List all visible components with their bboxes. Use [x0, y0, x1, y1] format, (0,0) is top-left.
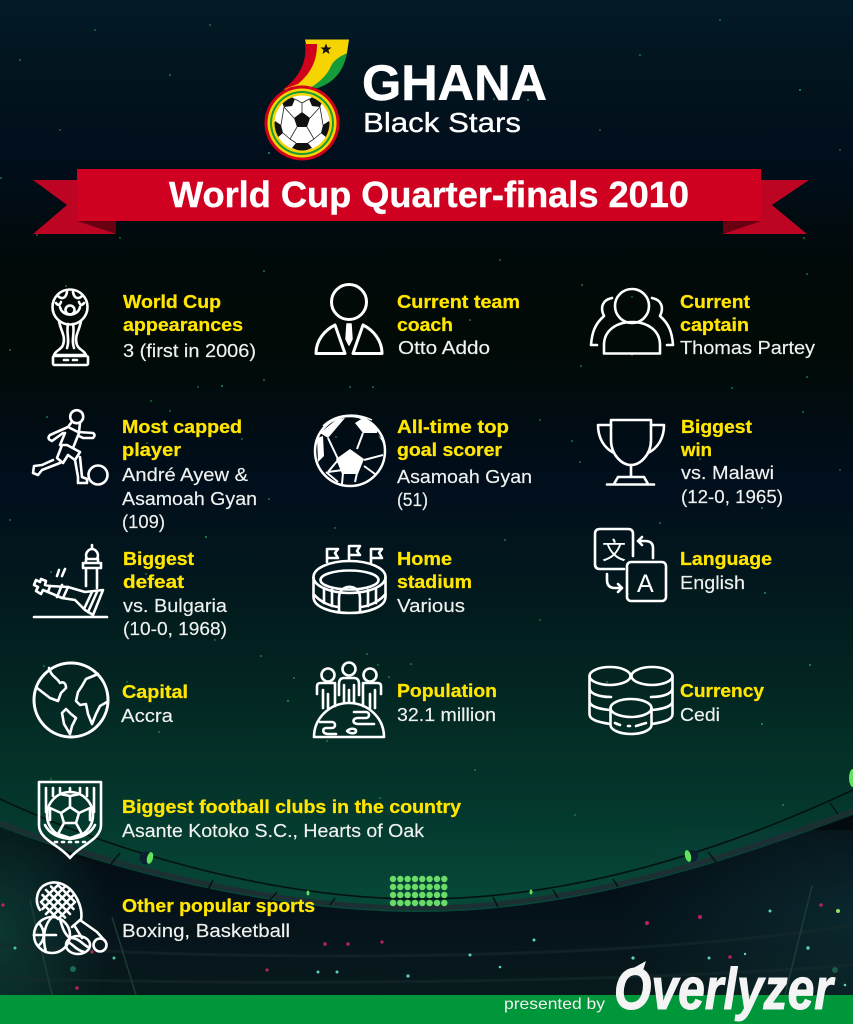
footer bar — [0, 995, 853, 1024]
text: Biggest defeat: defeat — [123, 571, 184, 592]
icon: people standing on globe — [314, 662, 384, 737]
text: Biggest win: Biggest — [681, 416, 752, 437]
text: Capital — [121, 681, 188, 726]
text: Most capped player: André Ayew & — [122, 465, 248, 485]
fact: Capital — [34, 663, 188, 737]
icon: world cup trophy — [52, 290, 88, 365]
icon: club crest — [39, 782, 101, 858]
text: Most capped player: (109) — [122, 512, 165, 532]
text: Biggest football clubs: Asante Kotoko S.C., Hearts of Oak — [122, 821, 425, 841]
text: Population: Population — [397, 680, 497, 701]
background star field — [0, 19, 841, 816]
roof spotlights — [140, 769, 853, 896]
text: Current captain — [680, 291, 815, 358]
logo wordmark: Black Stars — [363, 107, 521, 138]
fact: Most capped player — [33, 410, 257, 532]
icon: trophy cup — [598, 420, 664, 484]
text: Current team coach: coach — [397, 314, 453, 335]
text: Other popular sports — [122, 895, 315, 941]
text: Current captain: Current — [680, 291, 750, 312]
text: Biggest win: win — [680, 439, 712, 460]
icon: soccer ball — [315, 415, 388, 486]
icon: translate — [595, 529, 666, 601]
icon: stadium with flags — [314, 546, 386, 613]
text: Currency — [680, 680, 765, 725]
text: Current team coach: Otto Addo — [398, 338, 490, 358]
text: Population — [397, 680, 497, 725]
icon: globe — [34, 663, 108, 737]
logo wordmark — [362, 55, 547, 138]
text: Language: English — [680, 573, 745, 593]
text: Biggest football clubs: Biggest football clubs in the country — [122, 796, 462, 817]
fact: Currency — [590, 667, 765, 734]
crowd flash dots — [1, 903, 846, 990]
text: Other popular sports: Boxing, Basketball — [122, 921, 290, 941]
text: Biggest football clubs — [122, 796, 462, 841]
fact: Current captain — [591, 289, 815, 358]
text: Language: Language — [680, 548, 772, 569]
text: Biggest defeat: vs. Bulgaria — [123, 596, 228, 616]
icon: fallen chess king — [34, 545, 107, 617]
text: All-time top goal scorer: All-time top — [397, 416, 509, 437]
logo wordmark: GHANA — [362, 55, 547, 111]
text: Biggest win — [680, 416, 783, 507]
text: World Cup appearances — [123, 291, 256, 361]
title: World Cup Quarter-finals 2010 — [169, 174, 689, 215]
fact: Language — [595, 529, 772, 601]
text: Currency: Cedi — [680, 705, 720, 725]
text: Language — [680, 548, 772, 593]
text: All-time top goal scorer: Asamoah Gyan — [397, 467, 532, 487]
text: Capital: Accra — [121, 706, 174, 726]
text: Biggest defeat: Biggest — [123, 548, 194, 569]
stadium illustration — [0, 769, 853, 1000]
text: Biggest win: vs. Malawi — [681, 463, 774, 483]
text: Most capped player: Most capped — [122, 416, 242, 437]
text: Most capped player: player — [122, 439, 181, 460]
text: Population: 32.1 million — [397, 705, 496, 725]
fact: All-time top goal scorer — [315, 415, 532, 510]
text: Other popular sports: Other popular sports — [122, 895, 315, 916]
text: Biggest defeat: (10-0, 1968) — [123, 619, 227, 639]
text: Home stadium: stadium — [397, 571, 472, 592]
icon: group of people — [591, 289, 673, 354]
fact: Biggest win — [598, 416, 783, 507]
text: Current team coach: Current team — [397, 291, 520, 312]
text: Biggest defeat — [123, 548, 228, 639]
text: World Cup appearances: World Cup — [123, 291, 221, 312]
icon: coach in suit — [316, 284, 382, 354]
icon: translate: A — [637, 570, 654, 598]
text: Current team coach — [397, 291, 520, 358]
footer: presented by Overlyzer — [504, 957, 836, 1022]
text: Current captain: Thomas Partey — [680, 338, 815, 358]
team logo — [264, 40, 547, 160]
fact: Current team coach — [316, 284, 520, 358]
text: Biggest win: (12-0, 1965) — [681, 487, 783, 507]
icon: racket and balls — [34, 882, 106, 954]
fact: Home stadium — [314, 546, 472, 616]
icon: translate: 文 — [602, 531, 626, 566]
fact: World Cup appearances — [52, 290, 256, 365]
text: Home stadium — [397, 548, 472, 616]
fact: Population — [314, 662, 497, 737]
text: All-time top goal scorer: (51) — [397, 490, 428, 510]
footer: presented by Overlyzer: presented by — [504, 996, 605, 1013]
text: All-time top goal scorer — [397, 416, 532, 510]
text: Home stadium: Various — [397, 596, 465, 616]
text: Home stadium: Home — [397, 548, 452, 569]
fact: Other popular sports — [34, 882, 315, 954]
icon: ball medallion — [264, 86, 340, 160]
text: Most capped player — [122, 416, 257, 532]
fact: Biggest football clubs — [39, 782, 462, 858]
text: Current captain: captain — [680, 314, 749, 335]
text: World Cup appearances: 3 (first in 2006) — [123, 341, 256, 361]
title ribbon banner — [33, 169, 809, 234]
floodlight: centre panel — [390, 876, 447, 906]
text: Capital: Capital — [122, 681, 188, 702]
icon: coin stacks — [590, 667, 672, 734]
fact: Biggest defeat — [34, 545, 228, 639]
text: Most capped player: Asamoah Gyan — [122, 489, 257, 509]
text: World Cup appearances: appearances — [123, 314, 243, 335]
icon: Ghana flag ribbon — [282, 40, 349, 90]
icon: footballer kicking ball — [33, 410, 108, 484]
text: Currency: Currency — [680, 680, 765, 701]
text: All-time top goal scorer: goal scorer — [397, 439, 502, 460]
